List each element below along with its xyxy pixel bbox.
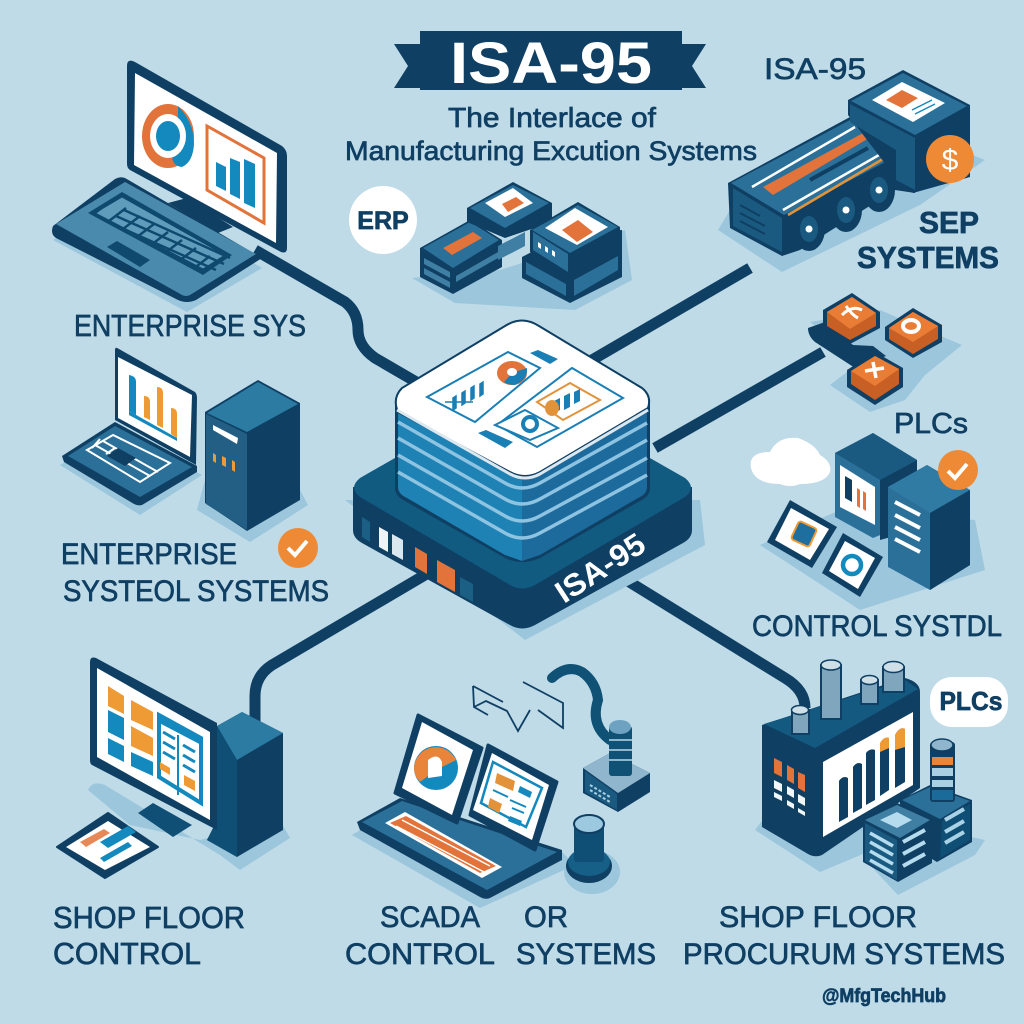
label: scada: OR (524, 901, 568, 934)
connector lines (255, 250, 823, 722)
icon: factory server stack (863, 803, 932, 882)
label: enterprise systeol systems: ENTERPRISE (61, 538, 237, 571)
icon: PLC blocks (808, 293, 962, 412)
label: enterprise sys: ENTERPRISE SYS (74, 308, 306, 343)
label: enterprise systeol systems: SYSTEOL SYSTEMS (63, 575, 329, 608)
icon: sensor tower (583, 720, 650, 812)
icon: factory right block (865, 785, 985, 895)
bubble: PLCs: PLCs (940, 686, 1002, 716)
icon: factory (755, 660, 920, 872)
icon: sensor puck (564, 815, 620, 894)
label: SEP systems: SYSTEMS (857, 240, 999, 275)
bubble: PLCs (930, 677, 1008, 727)
icon: cloud (751, 438, 830, 486)
label: SEP systems (857, 205, 999, 275)
icon: ERP bubble (349, 186, 417, 254)
icon: SEP truck: $ (942, 144, 959, 177)
panel: central hub (345, 320, 705, 640)
hub base: ISA-95 (549, 526, 652, 610)
subtitle: The Interlace of (448, 102, 656, 133)
credit: @MfgTechHub (822, 986, 946, 1007)
label: control system: CONTROL SYSTDL (752, 610, 1002, 643)
title banner: ISA-95 (450, 31, 652, 96)
label: PLCs right: PLCs (894, 408, 968, 440)
label: scada (345, 901, 656, 971)
icon: enterprise laptop two (60, 348, 308, 542)
label: shop floor control: SHOP FLOOR (53, 900, 245, 935)
label: SEP systems: SEP (919, 205, 979, 240)
subtitle: Manufacturing Excution Systems (345, 136, 757, 166)
label: shop floor control (53, 900, 245, 971)
label: shop floor procurum (683, 901, 1005, 971)
icon: control servers (760, 433, 985, 610)
panel: enterprise laptop (52, 61, 287, 312)
label: scada: SCADA (380, 901, 480, 934)
icon: SCADA workstation (352, 715, 575, 908)
label: scada: SYSTEMS (516, 938, 656, 971)
label: shop floor control: CONTROL (53, 936, 201, 971)
label: shop floor procurum: PROCURUM SYSTEMS (683, 938, 1005, 971)
icon: ERP bubble: ERP (357, 207, 409, 235)
label: enterprise systeol systems (61, 538, 329, 608)
icon: factory tower (930, 739, 955, 802)
label: ISA-95 top right: ISA-95 (764, 53, 866, 86)
label: scada: CONTROL (345, 938, 495, 971)
icon: shop floor desktop (57, 658, 290, 878)
icon: SEP truck (718, 70, 985, 272)
icon: sensor graph and cable (473, 669, 610, 740)
icon: check badge left (278, 528, 318, 568)
label: shop floor procurum: SHOP FLOOR (719, 901, 917, 934)
subtitle (345, 102, 757, 166)
title banner (394, 31, 706, 96)
hub stack (395, 320, 650, 562)
icon: ERP servers (412, 182, 632, 310)
hub base (345, 385, 705, 640)
